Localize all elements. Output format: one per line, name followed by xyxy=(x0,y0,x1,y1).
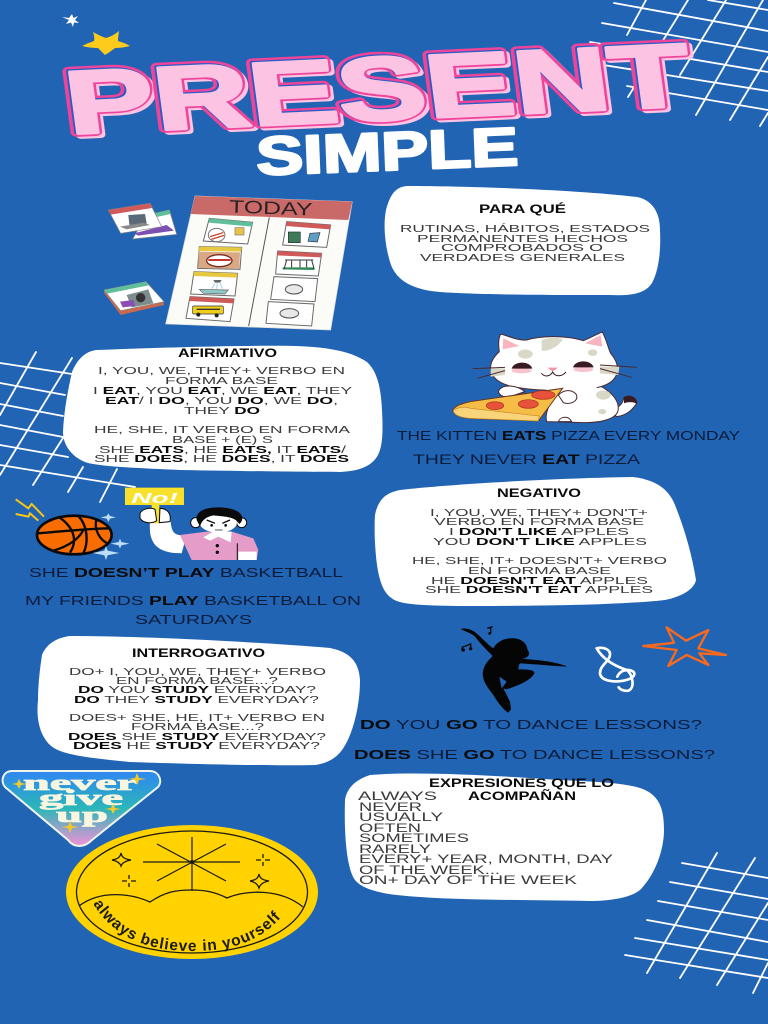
text block: para qué body: VERDADES GENERALES xyxy=(420,252,625,264)
text block: expressions list: OFTEN xyxy=(359,823,421,835)
text block: afirmativo rules: THEY DO xyxy=(184,405,260,417)
sentence: the kitten eats pizza: THE KITTEN EATS PIZZA EVERY MONDAY xyxy=(397,429,741,443)
illustration: kitten eating pizza xyxy=(453,332,637,423)
text block: interrogativo rules: DOES SHE STUDY EVERYDAY? xyxy=(68,731,326,743)
sentence: my friends play basketball xyxy=(25,594,361,627)
title: PRESENT: PRESENT xyxy=(59,25,697,154)
text block: afirmativo rules: BASE + (E) S xyxy=(172,434,273,446)
text block: afirmativo rules: I EAT , YOU EAT , WE EAT , THEY xyxy=(93,385,352,397)
icon: treble clef xyxy=(597,648,634,691)
illustration: daily schedule board and cards xyxy=(104,196,352,330)
panel: afirmativo xyxy=(63,346,383,472)
text block: expressions list: NEVER xyxy=(359,802,422,814)
text block: negativo rules: I, YOU, WE, THEY+ DON'T+ xyxy=(430,507,648,519)
icon: white star xyxy=(62,14,79,27)
text block: afirmativo rules: I, YOU, WE, THEY+ VERBO EN xyxy=(98,365,345,377)
subtitle: SIMPLE: SIMPLE xyxy=(255,117,519,187)
text block: expressions list: OF THE WEEK... xyxy=(359,865,500,877)
text block: afirmativo rules: HE, SHE, IT VERBO EN FORMA xyxy=(94,424,350,436)
illustration: dancer silhouette xyxy=(461,627,567,713)
text block: expressions list: ON+ DAY OF THE WEEK xyxy=(359,875,578,887)
heading: expresiones xyxy=(429,778,614,803)
badge: always believe in yourself: always believe in yourself xyxy=(94,900,280,952)
heading: expresiones: EXPRESIONES QUE LO xyxy=(429,778,614,790)
badge: never give up: give xyxy=(39,785,123,810)
text block: afirmativo rules: FORMA BASE xyxy=(165,375,278,387)
sentence: my friends play basketball: MY FRIENDS PLAY BASKETBALL ON xyxy=(25,594,361,608)
heading: interrogativo: INTERROGATIVO xyxy=(132,648,265,660)
text block: expressions list: ALWAYS xyxy=(358,791,438,803)
sentence: does she go to dance lessons: DOES SHE GO TO DANCE LESSONS? xyxy=(354,747,715,762)
heading: negativo: NEGATIVO xyxy=(497,488,581,500)
sentence: they never eat pizza: THEY NEVER EAT PIZZA xyxy=(413,451,641,467)
panel: expresiones xyxy=(345,774,664,901)
text block: expressions list: RARELY xyxy=(359,844,432,856)
text block: interrogativo rules: DO YOU STUDY EVERYDAY? xyxy=(78,684,316,696)
sentence: do you go to dance lessons: DO YOU GO TO DANCE LESSONS? xyxy=(360,717,702,732)
icon: yellow star xyxy=(82,31,130,55)
text block: expressions list: USUALLY xyxy=(359,812,444,824)
text block: para qué body: COMPROBADOS O xyxy=(441,242,603,254)
heading: para qué: PARA QUÉ xyxy=(479,203,566,216)
panel: para qué xyxy=(385,186,660,295)
text block: expressions list: SOMETIMES xyxy=(359,833,470,845)
badge: never give up xyxy=(3,770,160,846)
text block: interrogativo rules: DO THEY STUDY EVERYDAY? xyxy=(74,694,319,706)
text block: para qué body: PERMANENTES HECHOS xyxy=(417,233,628,245)
title: PRESENT: PRESENT xyxy=(57,24,695,153)
text block: afirmativo rules xyxy=(93,365,352,465)
text block: negativo rules: HE DOESN'T EAT APPLES xyxy=(431,575,648,587)
panel: negativo xyxy=(375,477,696,606)
heading: afirmativo: AFIRMATIVO xyxy=(178,348,277,360)
badge: never give up: never xyxy=(23,770,139,795)
text block: negativo rules xyxy=(412,507,667,596)
text block: para qué body: RUTINAS, HÁBITOS, ESTADOS xyxy=(400,222,650,235)
text block: negativo rules: VERBO EN FORMA BASE xyxy=(434,516,644,528)
text block: interrogativo rules xyxy=(68,666,326,752)
illustration: basketball xyxy=(16,499,129,560)
text block: afirmativo rules: SHE EATS , HE EATS, IT EATS / xyxy=(99,444,346,456)
icon: orange star xyxy=(643,627,726,666)
text block: negativo rules: HE, SHE, IT+ DOESN'T+ VERBO xyxy=(412,555,667,567)
panel: interrogativo xyxy=(38,636,360,765)
text block: afirmativo rules: EAT / I DO , YOU DO , WE DO , xyxy=(105,395,338,407)
heading: expresiones: ACOMPAÑAN xyxy=(468,790,576,803)
title: PRESENT: PRESENT xyxy=(57,24,695,153)
badge: always believe in yourself xyxy=(66,825,318,959)
sentence: she doesn't play basketball: SHE DOESN’T PLAY BASKETBALL xyxy=(29,566,343,580)
text block: expressions list: EVERY+ YEAR, MONTH, DAY xyxy=(359,854,614,866)
text block: interrogativo rules: DO+ I, YOU, WE, THEY+ VERBO xyxy=(69,666,326,678)
illustration: woman with no sign xyxy=(125,488,258,560)
text block: negativo rules: I DON'T LIKE APPLES xyxy=(449,526,629,538)
text block: para qué body xyxy=(400,222,650,264)
badge: never give up: up xyxy=(56,802,108,827)
text block: afirmativo rules: SHE DOES , HE DOES , IT DOES xyxy=(94,453,349,465)
text block: interrogativo rules: FORMA BASE...? xyxy=(131,721,264,733)
text block: negativo rules: SHE DOESN'T EAT APPLES xyxy=(425,584,653,596)
text block: interrogativo rules: DOES HE STUDY EVERYDAY? xyxy=(73,740,320,752)
text block: negativo rules: EN FORMA BASE xyxy=(468,565,611,577)
text block: negativo rules: YOU DON'T LIKE APPLES xyxy=(433,536,647,548)
sentence: my friends play basketball: SATURDAYS xyxy=(135,613,252,627)
illustration: daily schedule board and cards: TODAY xyxy=(229,197,313,219)
title: PRESENT: PRESENT xyxy=(62,27,699,156)
text block: expressions list xyxy=(358,791,614,887)
text block: interrogativo rules: DOES+ SHE, HE, IT+ VERBO EN xyxy=(69,712,325,724)
text block: interrogativo rules: EN FORMA BASE...? xyxy=(116,675,278,687)
illustration: woman with no sign: No! xyxy=(131,491,178,507)
title: PRESENT xyxy=(57,24,699,156)
